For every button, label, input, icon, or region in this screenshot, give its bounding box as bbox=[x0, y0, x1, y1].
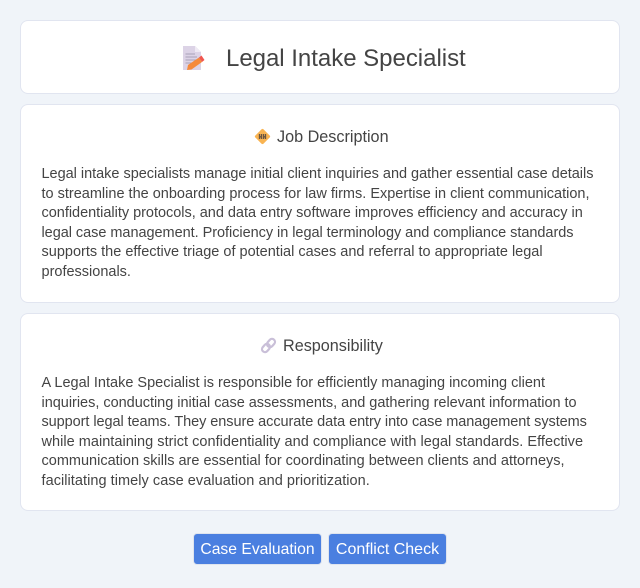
text: job description body: Legal intake specialists manage initial client inquiries and gather essential case details bbox=[42, 166, 593, 182]
heading: responsibility: Responsibility bbox=[283, 336, 383, 354]
text: responsibility body: communication skills are essential for coordinating between clients and attorneys, bbox=[42, 453, 565, 469]
icon: diamond sign bbox=[254, 128, 270, 144]
title text: Legal Intake Specialist bbox=[226, 45, 466, 72]
heading: job description: Job Description bbox=[277, 128, 389, 146]
button: conflict check bbox=[328, 533, 447, 565]
button: case evaluation bbox=[193, 533, 322, 565]
text: job description body: to streamline the onboarding process for law firms. Expertise in client communication, bbox=[42, 186, 590, 202]
panel: job description bbox=[20, 104, 620, 303]
text: responsibility body: while maintaining strict confidentiality and compliance with legal standards. Effective bbox=[42, 434, 583, 450]
text: job description body bbox=[42, 166, 593, 280]
panel: title bbox=[20, 20, 620, 94]
text: responsibility body: A Legal Intake Specialist is responsible for efficiently managing incoming client bbox=[42, 375, 545, 391]
text: job description body: professionals. bbox=[42, 264, 131, 280]
text: responsibility body: facilitating timely case evaluation and prioritization. bbox=[42, 472, 370, 488]
button: conflict check: Conflict Check bbox=[336, 541, 439, 558]
text: responsibility body: inquiries, conducting initial case assessments, and gathering relevant information to bbox=[42, 394, 577, 410]
text: job description body: legal case management. Proficiency in legal terminology and compliance standards bbox=[42, 224, 573, 240]
icon: document with pencil bbox=[183, 46, 204, 70]
panel: responsibility bbox=[20, 313, 620, 511]
text: responsibility body bbox=[42, 375, 587, 488]
button: case evaluation: Case Evaluation bbox=[200, 541, 315, 558]
text: job description body: confidentiality protocols, and data entry software improves efficiency and accuracy in bbox=[42, 205, 583, 221]
text: job description body: supports the effective triage of potential cases and referral to appropriate legal bbox=[42, 244, 543, 260]
text: responsibility body: support legal teams. They ensure accurate data entry into case management systems bbox=[42, 414, 587, 430]
icon: chain link bbox=[260, 338, 276, 354]
